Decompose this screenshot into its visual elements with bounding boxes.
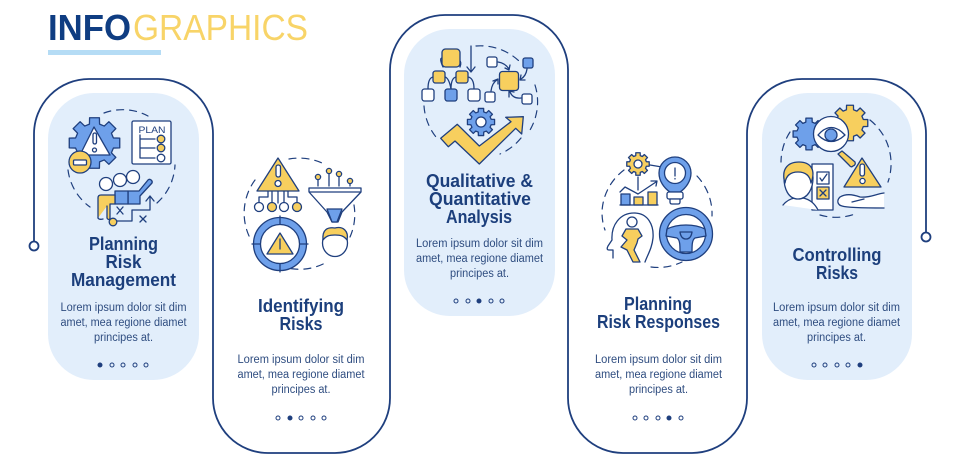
body text: Lorem ipsum dolor sit dim: [416, 238, 543, 250]
title: GRAPHICS: [133, 7, 308, 48]
heading: Planning: [89, 234, 158, 254]
icon: planning risk: [68, 110, 175, 226]
pagination dots: [276, 416, 326, 420]
icon: planning risk: PLAN: [138, 125, 166, 135]
pagination dots: [98, 363, 148, 367]
body text: principes at.: [94, 332, 153, 344]
heading: Risk: [106, 252, 142, 272]
panel: controlling risks: [773, 105, 901, 367]
body text: principes at.: [272, 384, 330, 396]
panel: planning risk management: [60, 110, 187, 367]
body text: [773, 302, 901, 344]
title: INFO: [48, 7, 131, 48]
panel background: qualitative and quantitative analysis: [404, 29, 555, 316]
heading: Planning: [624, 294, 692, 314]
title: [48, 7, 308, 55]
body text: principes at.: [450, 268, 509, 280]
icon: identifying risks: [244, 158, 361, 272]
heading: [792, 245, 882, 283]
heading: Risk Responses: [597, 312, 720, 332]
panel background: planning risk management: [48, 93, 199, 380]
heading: Controlling: [792, 245, 882, 265]
icon: planning risk responses: [602, 153, 712, 267]
body text: principes at.: [807, 332, 866, 344]
body text: Lorem ipsum dolor sit dim: [60, 302, 186, 314]
body text: amet, mea regione diamet: [238, 369, 365, 381]
body text: amet, mea regione diamet: [773, 317, 901, 329]
panel: planning risk responses: [595, 153, 723, 420]
heading: Identifying: [258, 296, 344, 316]
icon: qualitative and quantitative analysis: [422, 46, 538, 164]
body text: [595, 354, 723, 396]
pagination dots: [454, 299, 504, 303]
heading: Quantitative: [429, 189, 531, 209]
body text: principes at.: [629, 384, 688, 396]
body text: Lorem ipsum dolor sit dim: [238, 354, 364, 366]
body text: [416, 238, 544, 280]
heading: Qualitative &: [426, 171, 533, 191]
pagination dots: [812, 363, 862, 367]
heading: Management: [71, 270, 176, 290]
panel: qualitative and quantitative analysis: [416, 46, 544, 303]
icon: controlling risks: [781, 105, 891, 217]
heading: [258, 296, 344, 334]
body text: Lorem ipsum dolor sit dim: [595, 354, 722, 366]
heading: Risks: [816, 263, 858, 283]
body text: amet, mea regione diamet: [416, 253, 544, 265]
heading: Analysis: [446, 207, 512, 227]
heading: Risks: [280, 314, 322, 334]
pagination dots: [633, 416, 683, 420]
heading: [597, 294, 720, 332]
panel: identifying risks: [238, 158, 365, 420]
body text: amet, mea regione diamet: [595, 369, 723, 381]
body text: Lorem ipsum dolor sit dim: [773, 302, 900, 314]
panel background: controlling risks: [762, 93, 912, 380]
body text: [238, 354, 365, 396]
heading: [426, 171, 533, 227]
body text: amet, mea regione diamet: [60, 317, 187, 329]
body text: [60, 302, 187, 344]
heading: [71, 234, 176, 290]
